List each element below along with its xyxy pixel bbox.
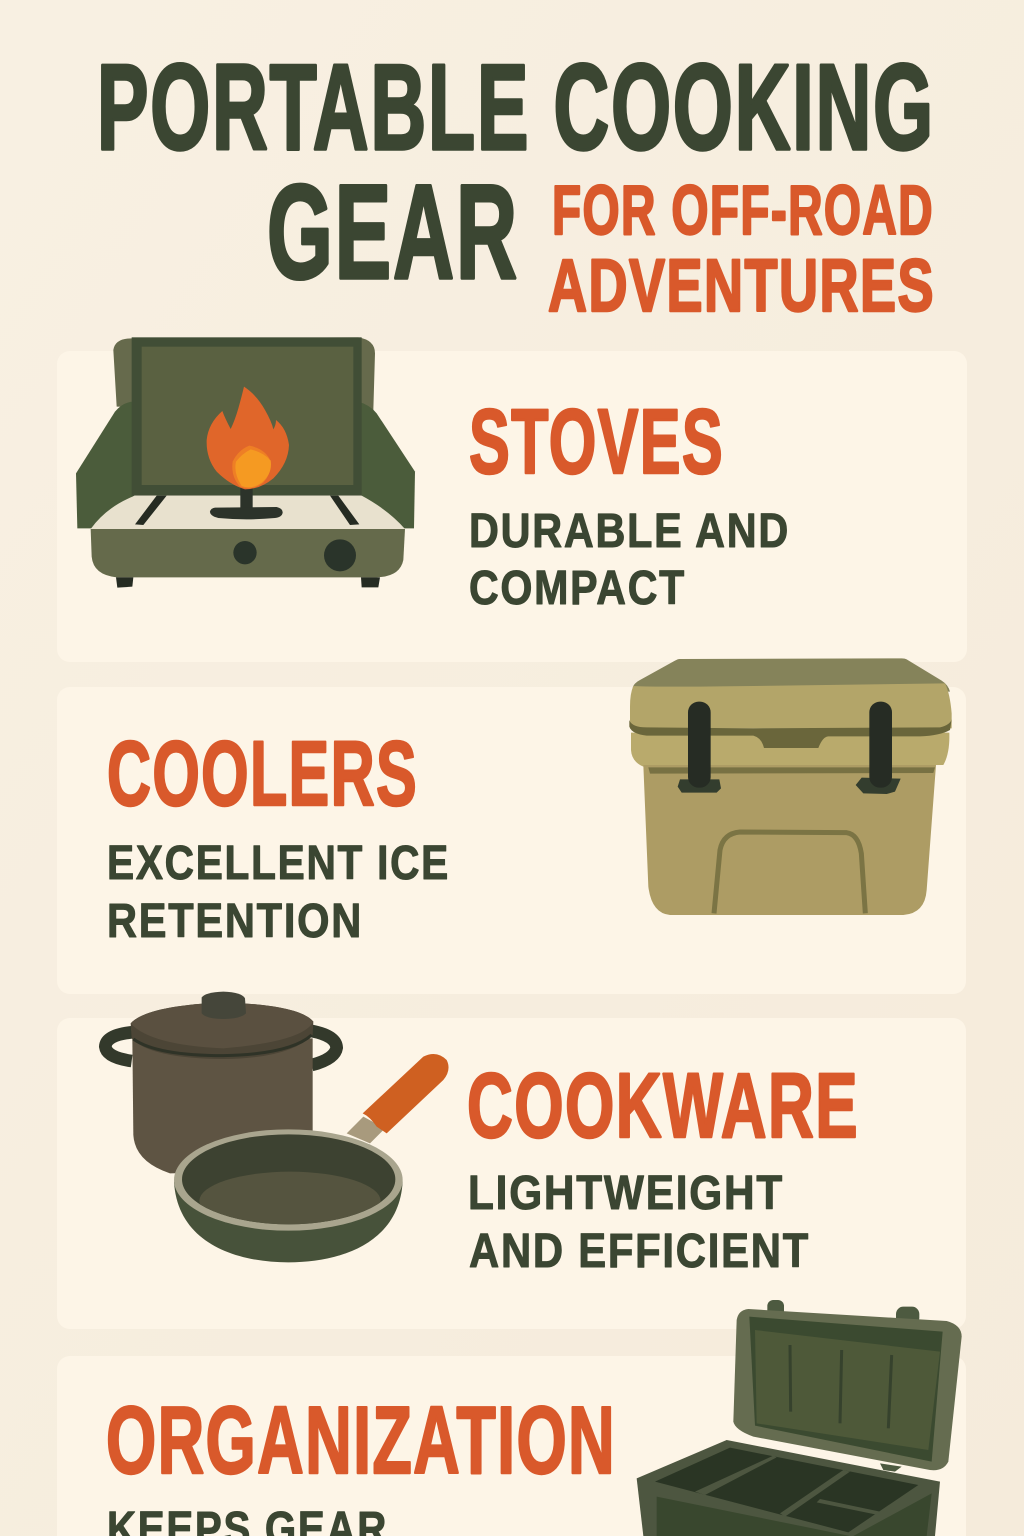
- text: cookware description: LIGHTWEIGHT: [468, 1167, 784, 1220]
- heading: stoves: STOVES: [469, 391, 724, 493]
- panel: coolers: [57, 658, 966, 994]
- text: stoves description: DURABLE AND: [469, 505, 790, 558]
- text: stoves description: COMPACT: [469, 562, 686, 615]
- panel: organization: [57, 1300, 966, 1536]
- text: coolers description: RETENTION: [107, 895, 363, 948]
- icon: pot and frying pan: [105, 992, 449, 1262]
- icon: cooler: [629, 658, 952, 915]
- text: cookware description: [468, 1167, 810, 1278]
- icon: flame: [207, 387, 289, 489]
- title: GEAR: [267, 158, 519, 307]
- panel: cookware: [57, 992, 966, 1329]
- text: coolers description: EXCELLENT ICE: [107, 837, 450, 890]
- icon: open storage box: [637, 1300, 962, 1536]
- title: [97, 39, 935, 327]
- text: stoves description: [469, 505, 790, 615]
- heading: coolers: COOLERS: [107, 723, 418, 825]
- heading: organization: ORGANIZATION: [106, 1387, 616, 1494]
- text: cookware description: AND EFFICIENT: [469, 1225, 810, 1278]
- panel: stoves: [57, 337, 967, 662]
- text: coolers description: [107, 837, 450, 948]
- icon: camp stove with flame: [76, 337, 415, 588]
- heading: cookware: COOKWARE: [467, 1055, 859, 1157]
